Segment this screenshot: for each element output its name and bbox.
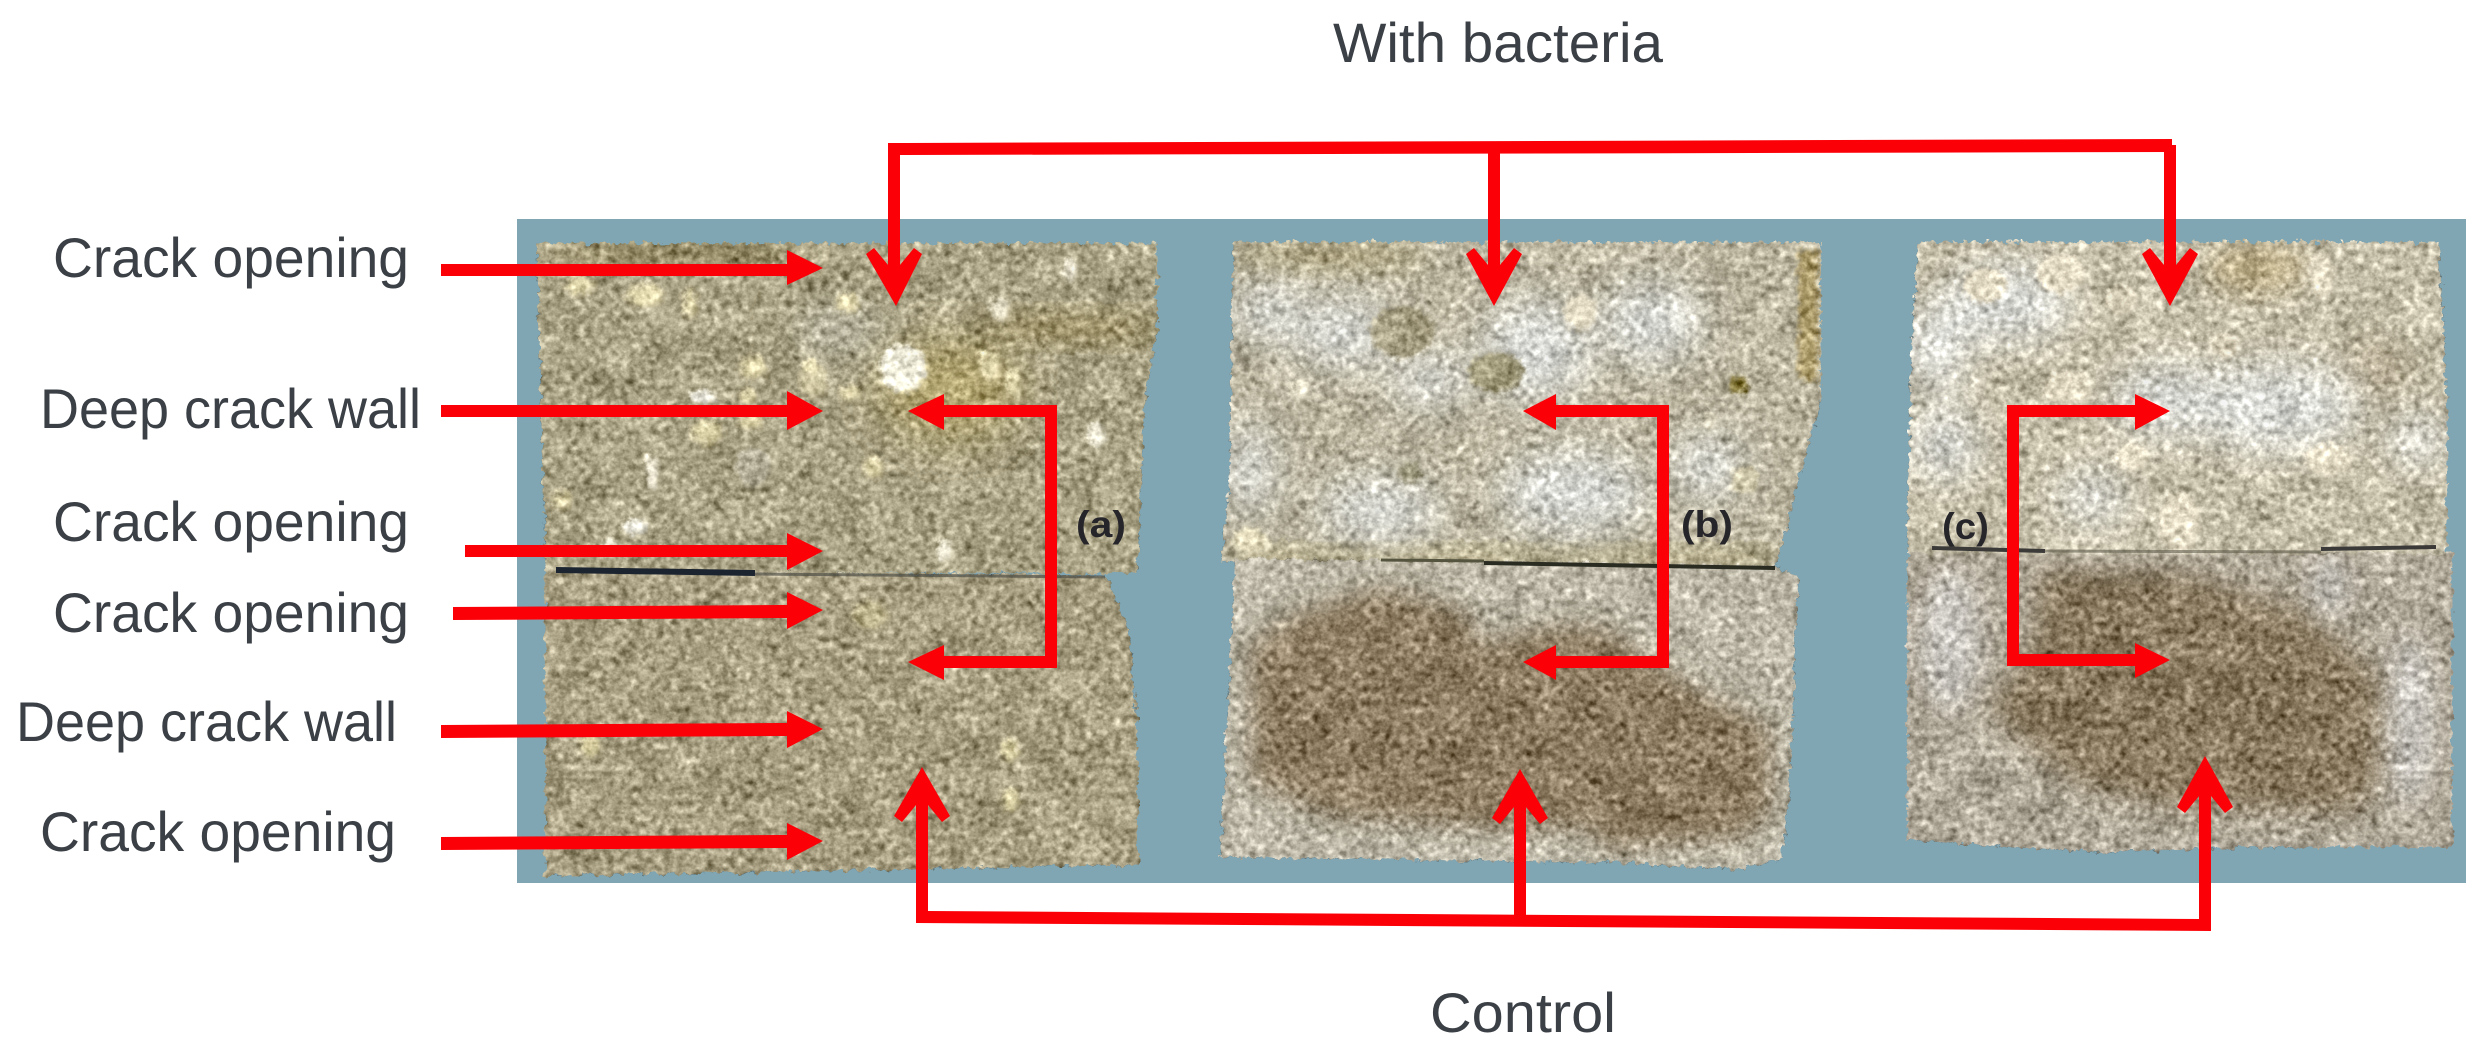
crack line in specimen (b): [1381, 560, 1775, 568]
specimen (c) with bacteria, upper half: [1904, 242, 2448, 556]
arrows: from left labels to specimen (a): [441, 250, 823, 860]
label: crack opening 3: Crack opening: [53, 581, 409, 644]
arrow bracket: control, bottom: [894, 756, 2233, 931]
panel: blue-grey specimen backdrop: [517, 219, 2466, 883]
label: panel a: (a): [1076, 504, 1126, 545]
specimen (a) control, lower half: [545, 571, 1137, 876]
label: deep crack wall 1: Deep crack wall: [40, 377, 421, 440]
label: with bacteria: With bacteria: [1333, 11, 1664, 74]
label: control: Control: [1430, 981, 1616, 1044]
arrow bracket: specimen (b) bond: [1523, 394, 1669, 680]
specimen (b) with bacteria, upper half: [1222, 242, 1821, 568]
label: crack opening 4: Crack opening: [40, 800, 396, 863]
specimen (c) control, lower half: [1907, 554, 2452, 852]
label: deep crack wall 2: Deep crack wall: [16, 690, 397, 753]
arrow bracket: specimen (c) bond: [2007, 394, 2170, 678]
arrow bracket: specimen (a) bond: [908, 394, 1057, 680]
arrow bracket: with bacteria, top: [866, 139, 2198, 306]
specimen (a) with bacteria, upper half: [537, 242, 1160, 573]
label: panel b: (b): [1681, 504, 1733, 545]
crack line in specimen (a): [556, 570, 1105, 577]
specimen (b) control, lower half: [1220, 558, 1798, 870]
crack line in specimen (c): [1932, 547, 2436, 552]
label: crack opening 2: Crack opening: [53, 490, 409, 553]
label: crack opening 1: Crack opening: [53, 226, 409, 289]
label: panel c: (c): [1942, 506, 1989, 547]
